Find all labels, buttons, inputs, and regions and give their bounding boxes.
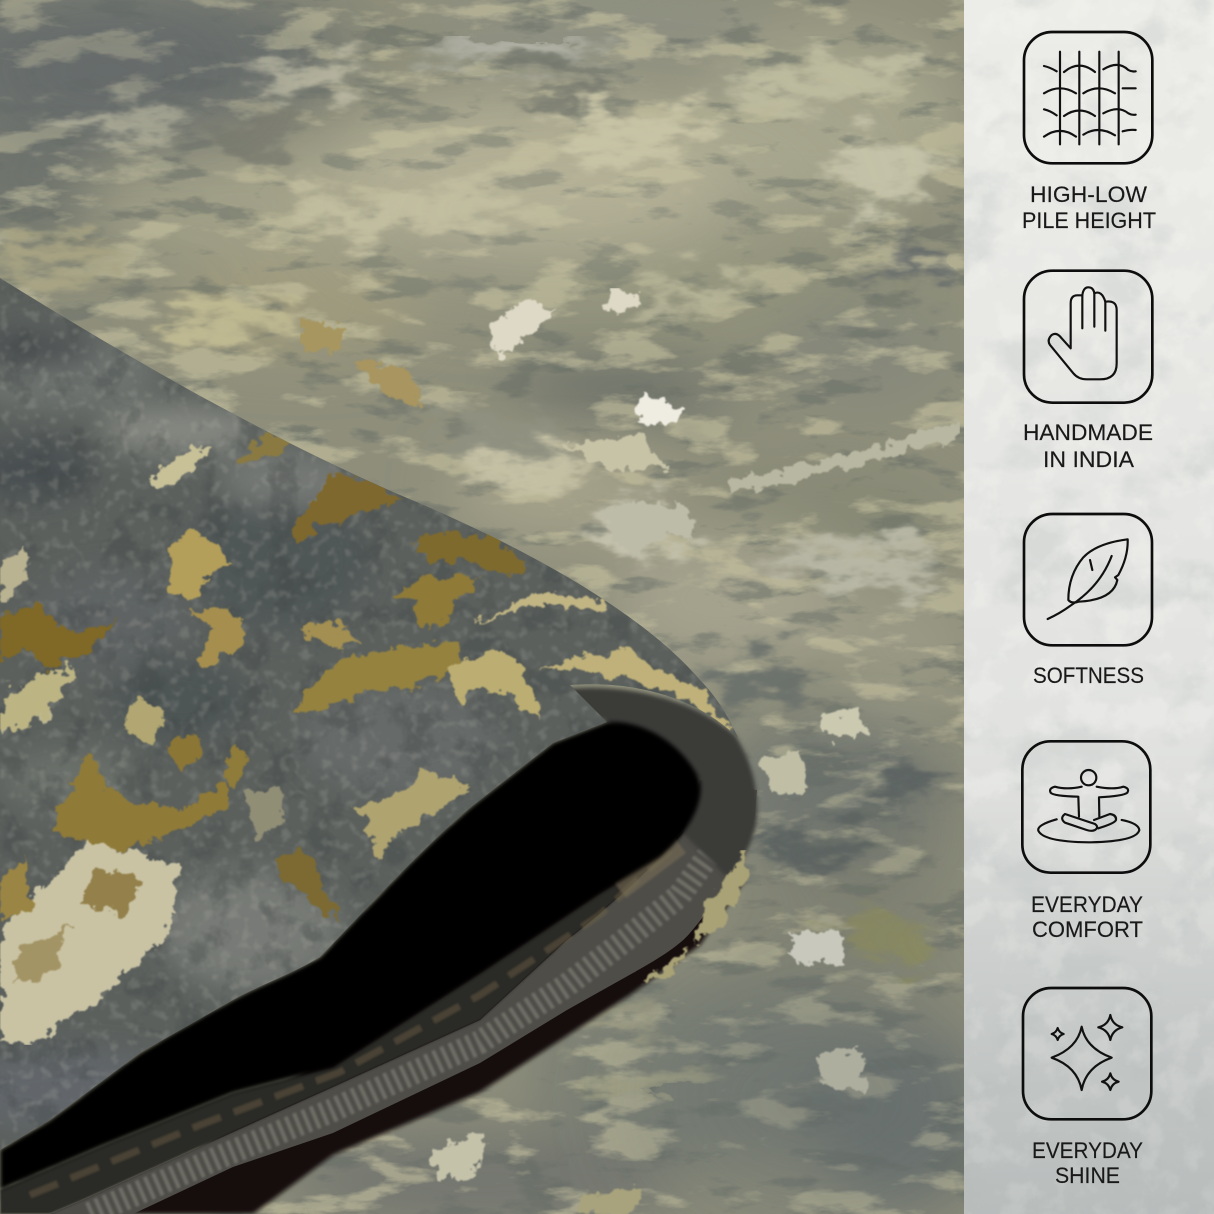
feature: handmade in india — [1023, 271, 1153, 472]
label: everyday comfort: EVERYDAY — [1031, 892, 1143, 917]
cream fringe on the rolled edge — [640, 850, 752, 985]
label: everyday shine — [1032, 1138, 1143, 1188]
feature: high-low pile height — [1022, 32, 1156, 233]
label: handmade in india: HANDMADE — [1023, 420, 1153, 445]
rug backing mesh — [0, 817, 693, 1214]
rug top surface — [0, 270, 770, 1160]
icon: pile weave — [1024, 32, 1152, 163]
gold and cream dye patches — [0, 432, 735, 1045]
label: everyday comfort — [1031, 892, 1143, 942]
label: high-low pile height — [1022, 182, 1156, 233]
black fold opening — [0, 722, 701, 1190]
label: high-low pile height: PILE HEIGHT — [1022, 208, 1156, 233]
rolled rug corner — [0, 270, 770, 1214]
icon: hand — [1024, 271, 1152, 403]
label: softness: SOFTNESS — [1033, 663, 1144, 688]
feature: everyday shine — [1023, 988, 1151, 1188]
side panel background — [964, 0, 1214, 1214]
icon: sparkles — [1023, 988, 1151, 1119]
icon: feather — [1024, 514, 1152, 645]
label: high-low pile height: HIGH-LOW — [1030, 182, 1147, 207]
icon: meditating figure — [1022, 741, 1150, 873]
shadow under the rolled edge — [110, 800, 745, 1214]
bound edge cord — [50, 780, 757, 1214]
feature: everyday comfort — [1022, 741, 1150, 942]
label: everyday comfort: COMFORT — [1032, 917, 1143, 942]
label: handmade in india: IN INDIA — [1043, 447, 1134, 472]
feature: softness — [1024, 514, 1152, 688]
background cream and grey mottling — [0, 0, 964, 1214]
label: everyday shine: SHINE — [1055, 1163, 1120, 1188]
fuzzy rim of the fold — [540, 688, 757, 877]
label: handmade in india — [1023, 420, 1153, 472]
label: everyday shine: EVERYDAY — [1032, 1138, 1143, 1163]
wool speckle — [0, 270, 770, 1160]
